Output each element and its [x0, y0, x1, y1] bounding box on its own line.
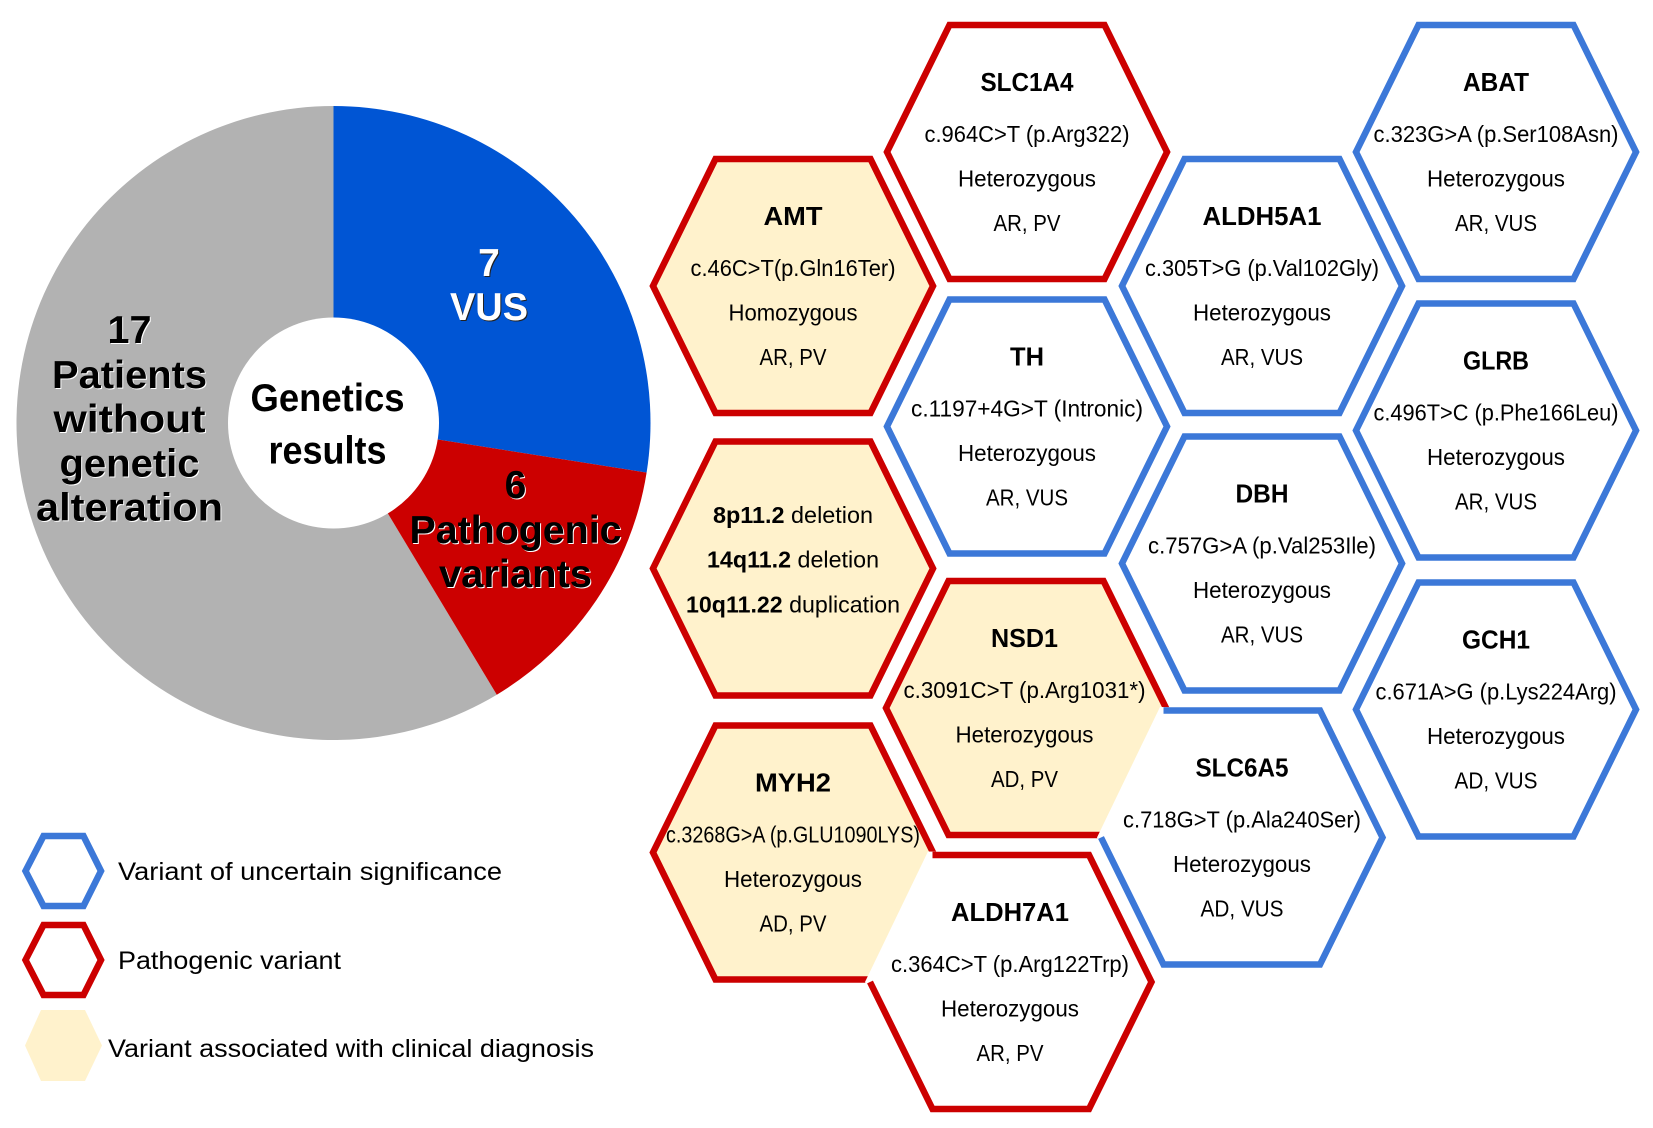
gene details: AMT: Homozygous: [728, 300, 858, 326]
gene details: SLC6A5: AD, VUS: [1200, 896, 1284, 922]
gene details: GCH1: AD, VUS: [1454, 768, 1538, 794]
legend icon: pathogenic variant: [26, 925, 101, 995]
slice: pathogenic variants: [334, 423, 647, 695]
gene details: NSD1: Heterozygous: [956, 722, 1094, 748]
gene details: ABAT: [1374, 67, 1618, 236]
legend icon: clinical diagnosis: [25, 1010, 102, 1081]
hexagon: NSD1: [886, 581, 1166, 835]
gene details: ALDH7A1: c.364C>T (p.Arg122Trp): [891, 951, 1129, 977]
hexagon: ABAT: [1356, 25, 1636, 279]
gene details: TH: AR, VUS: [986, 484, 1068, 510]
legend text: variant of uncertain significance: Variant of uncertain significance: [118, 858, 502, 886]
gene details: ALDH7A1: ALDH7A1: [951, 897, 1069, 927]
gene details: ALDH5A1: c.305T>G (p.Val102Gly): [1145, 255, 1379, 281]
gene details: ABAT: AR, VUS: [1455, 210, 1537, 236]
gene details: MYH2: [666, 768, 920, 936]
legend text: clinical diagnosis: Variant associated with clinical diagnosis: [108, 1035, 594, 1063]
gene details: SLC6A5: Heterozygous: [1173, 851, 1311, 877]
gene details: GCH1: c.671A>G (p.Lys224Arg): [1376, 678, 1616, 704]
gene details: GCH1: GCH1: [1462, 624, 1530, 654]
hexagon: DBH: [1122, 436, 1402, 690]
chromosomal alteration list: 14q11.2 deletion: [707, 546, 879, 572]
gene details: GLRB: [1374, 346, 1618, 514]
gene details: NSD1: NSD1: [991, 623, 1058, 653]
label: 6 pathogenic variants: Pathogenic: [410, 509, 622, 552]
label: 17 patients without genetic alteration: [36, 309, 223, 530]
ALDH7A1 outline: [870, 855, 1152, 1109]
SLC6A5 outline: [1101, 710, 1382, 964]
gene details: ABAT: Heterozygous: [1427, 166, 1565, 192]
legend text: pathogenic variant: Pathogenic variant: [118, 947, 341, 975]
gene details: DBH: [1148, 478, 1376, 648]
gene details: SLC1A4: [924, 67, 1130, 236]
hexagon: GLRB: [1356, 304, 1636, 558]
centre label: [250, 377, 404, 472]
hexagon: ALDH5A1: [1122, 159, 1402, 413]
gene details: GCH1: [1376, 624, 1616, 794]
gene details: TH: [911, 342, 1143, 510]
hexagon: SLC1A4: [887, 25, 1167, 279]
gene details: SLC1A4: c.964C>T (p.Arg322): [924, 121, 1130, 147]
gene details: AMT: c.46C>T(p.Gln16Ter): [690, 255, 896, 281]
gene details: SLC1A4: AR, PV: [994, 210, 1061, 236]
label: 17 patients without genetic alteration: genetic: [60, 442, 200, 486]
gene details: ALDH5A1: [1145, 201, 1379, 370]
hexagon: GCH1: [1356, 582, 1636, 836]
gene details: AMT: [690, 201, 896, 370]
gene details: TH: c.1197+4G>T (Intronic): [911, 396, 1143, 422]
gene details: NSD1: c.3091C>T (p.Arg1031*): [904, 677, 1146, 703]
gene details: ALDH7A1: AR, PV: [976, 1040, 1044, 1066]
gene details: GLRB: AR, VUS: [1455, 488, 1537, 514]
label: 17 patients without genetic alteration: without: [52, 398, 206, 441]
gene details: DBH: c.757G>A (p.Val253Ile): [1148, 532, 1376, 558]
hexagon: ALDH7A1: [865, 852, 1152, 1109]
label: 6 pathogenic variants: [410, 464, 622, 596]
centre label: results: [268, 430, 386, 472]
gene details: SLC6A5: SLC6A5: [1196, 752, 1288, 782]
gene details: TH: Heterozygous: [958, 440, 1096, 466]
hexagon: SLC6A5: [1097, 707, 1382, 964]
gene details: DBH: AR, VUS: [1221, 622, 1303, 648]
gene details: ABAT: ABAT: [1463, 67, 1529, 97]
gene details: GLRB: c.496T>C (p.Phe166Leu): [1374, 400, 1618, 426]
gene details: GLRB: Heterozygous: [1427, 444, 1565, 470]
label: 17 patients without genetic alteration: 17: [108, 309, 152, 352]
hexagon: chromosomal alterations: [653, 442, 933, 696]
label: 17 patients without genetic alteration: alteration: [36, 487, 223, 530]
legend icon: variant of uncertain significance: [26, 836, 101, 906]
gene details: GLRB: GLRB: [1463, 346, 1529, 376]
label: 7 VUS: 7: [478, 242, 500, 285]
gene details: MYH2: AD, PV: [760, 910, 827, 936]
slice: patients without genetic alteration: [16, 106, 497, 740]
gene details: SLC1A4: Heterozygous: [958, 166, 1096, 192]
gene details: ABAT: c.323G>A (p.Ser108Asn): [1374, 121, 1618, 147]
hexagon: TH: [887, 300, 1167, 554]
gene details: ALDH5A1: Heterozygous: [1193, 300, 1331, 326]
hexagon: MYH2: [653, 726, 933, 980]
gene details: SLC6A5: [1123, 752, 1361, 922]
gene details: SLC6A5: c.718G>T (p.Ala240Ser): [1123, 806, 1361, 832]
gene details: NSD1: [904, 623, 1146, 792]
hexagon: AMT: [653, 159, 933, 413]
gene details: MYH2: c.3268G>A (p.GLU1090LYS): [666, 822, 920, 848]
label: 6 pathogenic variants: 6: [505, 464, 526, 507]
gene details: DBH: DBH: [1236, 478, 1288, 508]
gene details: GCH1: Heterozygous: [1427, 723, 1565, 749]
chromosomal alteration list: 10q11.22 duplication: [686, 592, 900, 618]
gene details: ALDH7A1: Heterozygous: [941, 996, 1079, 1022]
gene details: ALDH5A1: ALDH5A1: [1202, 201, 1322, 231]
gene details: MYH2: Heterozygous: [724, 866, 862, 892]
chromosomal alteration list: [686, 502, 900, 618]
label: 7 VUS: VUS: [450, 286, 528, 329]
gene details: ALDH5A1: AR, VUS: [1221, 344, 1303, 370]
label: 7 VUS: [450, 242, 528, 329]
donut centre hole: [228, 318, 439, 528]
slice: VUS: [334, 106, 651, 473]
gene details: MYH2: MYH2: [755, 768, 831, 798]
gene details: TH: TH: [1010, 342, 1044, 372]
gene details: AMT: AR, PV: [760, 344, 827, 370]
legend: [25, 836, 594, 1081]
label: 17 patients without genetic alteration: Patients: [52, 354, 207, 397]
centre label: Genetics: [250, 377, 404, 420]
label: 6 pathogenic variants: variants: [439, 553, 592, 596]
gene details: ALDH7A1: [891, 897, 1129, 1066]
donut chart: genetics results: [16, 106, 651, 740]
gene details: SLC1A4: SLC1A4: [980, 67, 1074, 97]
chromosomal alteration list: 8p11.2 deletion: [713, 502, 873, 528]
gene details: AMT: AMT: [764, 201, 823, 231]
gene details: NSD1: AD, PV: [991, 766, 1059, 792]
gene details: DBH: Heterozygous: [1193, 577, 1331, 603]
